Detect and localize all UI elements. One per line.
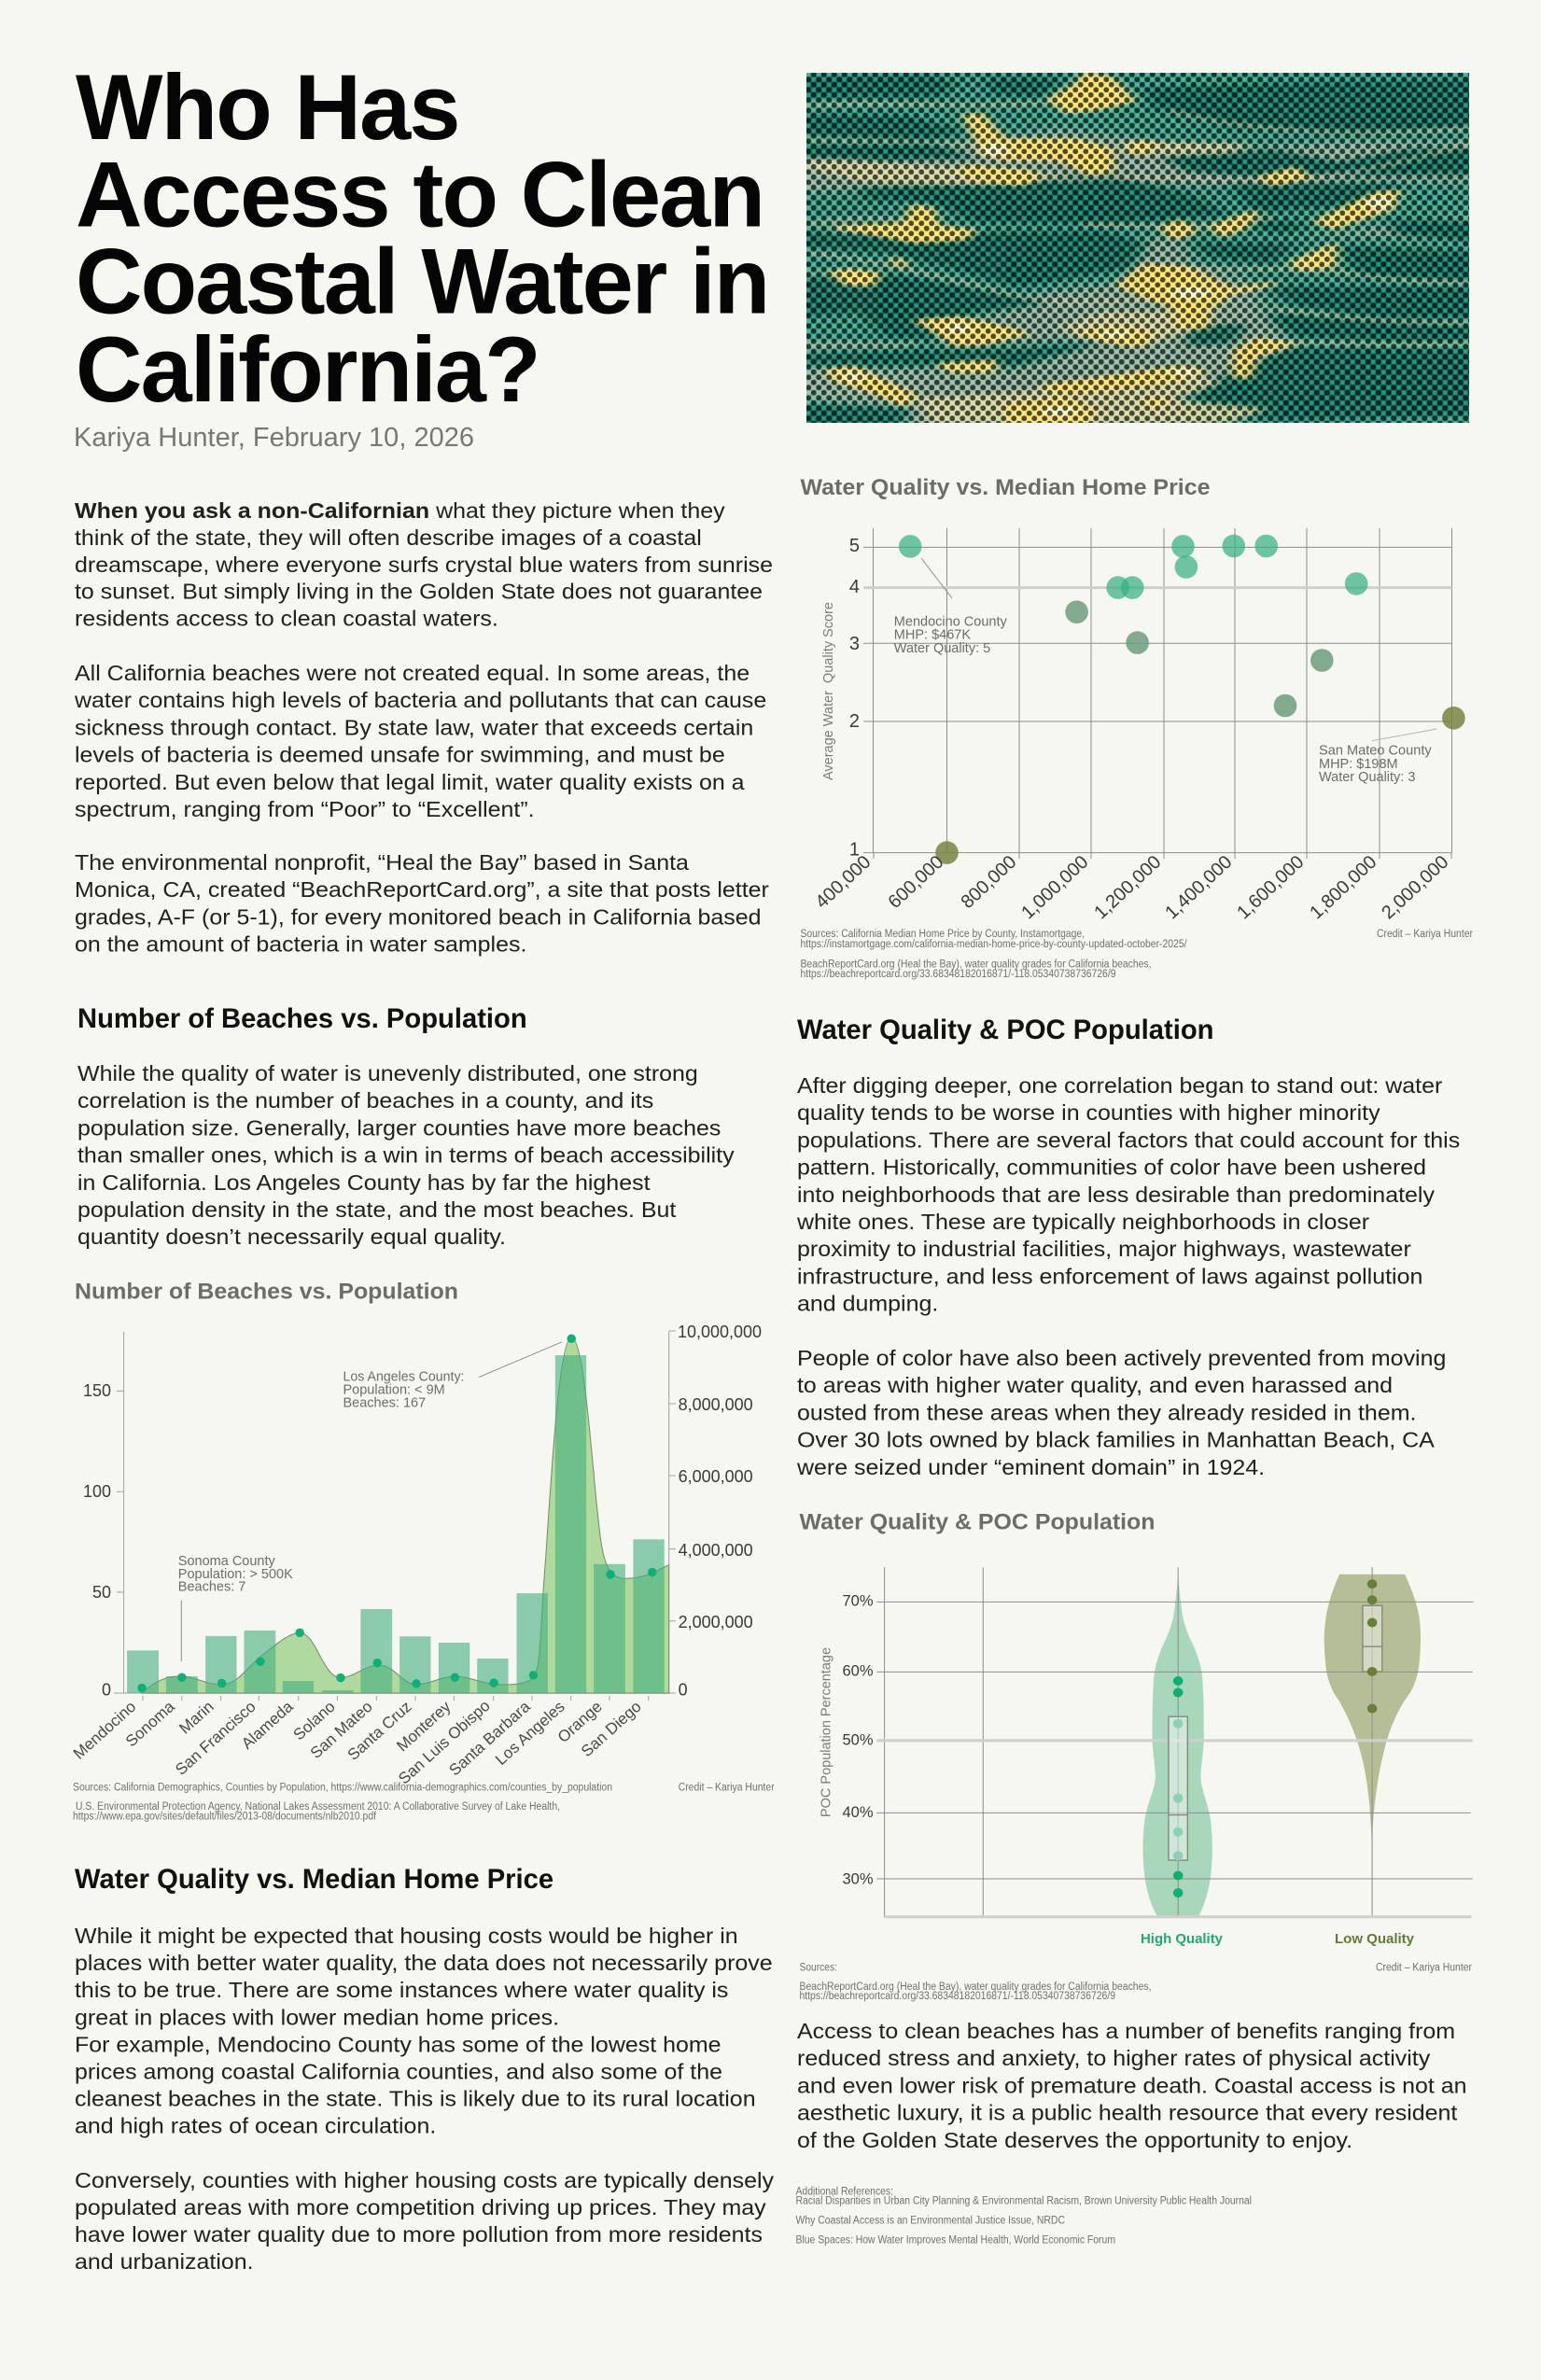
text: water quality and POC population: white ones. These are typically neighborhoods in closer xyxy=(796,1211,1369,1235)
intro paragraph 2: spectrum, ranging from “Poor” to “Excellent”. xyxy=(75,798,535,822)
chart sources: Sources: California Demographics, Counties by Population, https://www.california-demographics.com/counties_by_population xyxy=(73,1783,612,1794)
additional references: Additional References: xyxy=(795,2187,893,2198)
chart sources xyxy=(799,1962,1472,2002)
right axis labels xyxy=(678,1323,762,1699)
callout: Mendocino County: Water Quality: 5 xyxy=(894,641,990,656)
byline: Kariya Hunter, February 10, 2026 xyxy=(74,423,474,453)
callout: San Mateo County: Water Quality: 3 xyxy=(1319,770,1415,785)
text: water quality and POC population: infrastructure, and less enforcement of laws against pollution xyxy=(797,1265,1422,1289)
x axis labels: 400,000 xyxy=(812,852,875,913)
right axis labels: 10,000,000 xyxy=(678,1323,762,1341)
callout: Los Angeles County: Los Angeles County: xyxy=(343,1370,465,1385)
category label: high quality: High Quality xyxy=(1141,1931,1224,1947)
county labels: Monterey xyxy=(393,1698,455,1755)
text: water quality and POC population: Over 30 lots owned by black families in Manhattan Beach, CA xyxy=(797,1428,1436,1452)
violin: low quality xyxy=(1324,1575,1421,1845)
callout: Sonoma County: Population: > 500K xyxy=(178,1567,293,1582)
x axis labels: 2,000,000 xyxy=(1378,852,1452,923)
left axis labels: 0 xyxy=(102,1680,111,1699)
county labels: Santa Cruz xyxy=(344,1698,415,1764)
callout: Mendocino County: Mendocino County xyxy=(894,614,1008,629)
x axis labels: 1,000,000 xyxy=(1017,852,1092,923)
text: water quality vs home price: For example, Mendocino County has some of the lowest home xyxy=(75,2033,721,2057)
intro paragraph 1: dreamscape, where everyone surfs crystal blue waters from sunrise xyxy=(75,553,773,578)
chart sources: Sources: xyxy=(799,1962,837,1973)
title: Coastal Water in xyxy=(76,230,768,333)
chart: water quality vs median home price xyxy=(801,475,1473,980)
chart sources xyxy=(73,1783,775,1822)
y axis labels: 60% xyxy=(842,1663,874,1680)
intro paragraph 1: residents access to clean coastal waters. xyxy=(75,607,498,631)
population area curve xyxy=(142,1337,669,1693)
y axis labels xyxy=(842,1593,874,1888)
left axis labels: 150 xyxy=(83,1381,111,1400)
text: number of beaches: correlation is the number of beaches in a county, and its xyxy=(77,1089,653,1113)
y axis title: POC Population Percentage xyxy=(819,1647,834,1817)
chart title: Number of Beaches vs. Population xyxy=(75,1279,458,1305)
chart sources: Sources: California Median Home Price by County, Instamortgage, xyxy=(801,929,1085,940)
chart sources xyxy=(801,929,1473,980)
right axis labels: 0 xyxy=(679,1680,688,1699)
title: Who Has xyxy=(76,55,459,159)
closing paragraph: of the Golden State deserves the opportunity to enjoy. xyxy=(797,2129,1352,2153)
text: water quality and POC population: populations. There are several factors that could account for this xyxy=(797,1128,1460,1153)
chart title: Water Quality & POC Population xyxy=(799,1510,1156,1535)
text: water quality vs home price: populated areas with more competition driving up prices. They may xyxy=(75,2196,767,2220)
title: California? xyxy=(76,317,539,421)
text: water quality vs home price: While it might be expected that housing costs would be higher in xyxy=(75,1925,738,1949)
chart sources: https://www.epa.gov/sites/default/files/2013-08/documents/nlb2010.pdf xyxy=(73,1811,377,1822)
x axis labels xyxy=(812,852,1452,923)
chart sources: https://beachreportcard.org/33.68348182016871/-118.05340738736726/9 xyxy=(799,1991,1115,2002)
text: water quality vs home price: and urbanization. xyxy=(75,2250,254,2275)
county labels: Solano xyxy=(290,1698,339,1743)
chart: number of beaches vs population xyxy=(70,1279,775,1822)
intro paragraph 3: grades, A-F (or 5-1), for every monitored beach in California based xyxy=(75,905,762,930)
text: number of beaches: than smaller ones, which is a win in terms of beach accessibility xyxy=(77,1143,735,1168)
intro paragraph 2: All California beaches were not created equal. In some areas, the xyxy=(75,662,749,686)
text: number of beaches: population density in the state, and the most beaches. But xyxy=(77,1198,677,1223)
county labels: Los Angeles xyxy=(492,1698,568,1769)
county labels: San Mateo xyxy=(307,1698,376,1762)
y axis title: Average Water Quality Score xyxy=(821,602,836,780)
callout: Los Angeles County: Population: < 9M xyxy=(343,1383,445,1398)
text: number of beaches: population size. Generally, larger counties have more beaches xyxy=(77,1116,721,1141)
additional references: Why Coastal Access is an Environmental Justice Issue, NRDC xyxy=(795,2216,1065,2227)
chart sources: https://instamortgage.com/california-median-home-price-by-county-updated-october-2025/ xyxy=(801,939,1187,950)
chart sources: Credit – Kariya Hunter xyxy=(1376,1962,1472,1973)
bars: beaches per county xyxy=(127,1355,665,1693)
county labels: Alameda xyxy=(238,1697,297,1753)
closing paragraph: and even lower risk of premature death. Coastal access is not an xyxy=(797,2074,1467,2098)
category label: low quality: Low Quality xyxy=(1335,1931,1415,1947)
x axis labels: 1,800,000 xyxy=(1306,852,1380,923)
data points xyxy=(899,535,1465,864)
x axis labels: 600,000 xyxy=(885,852,947,913)
closing paragraph: aesthetic luxury, it is a public health resource that every resident xyxy=(797,2101,1458,2125)
heading: number of beaches: Number of Beaches vs. Population xyxy=(77,1004,527,1034)
callout: San Mateo County xyxy=(1319,729,1437,785)
county labels: San Luis Obispo xyxy=(395,1697,494,1787)
callout: Sonoma County xyxy=(178,1554,293,1661)
x axis labels: 1,600,000 xyxy=(1233,852,1308,923)
population dots xyxy=(137,1334,657,1692)
chart sources: Credit – Kariya Hunter xyxy=(679,1783,775,1794)
y axis labels: 2 xyxy=(849,711,860,732)
callout: Mendocino County xyxy=(894,558,1008,656)
text: water quality vs home price: prices among coastal California counties, and also some of the xyxy=(75,2060,722,2084)
intro paragraph 3: on the amount of bacteria in water samples. xyxy=(75,932,526,957)
y axis labels: 5 xyxy=(849,536,860,556)
callout: San Mateo County: San Mateo County xyxy=(1319,744,1432,759)
chart sources: U.S. Environmental Protection Agency, National Lakes Assessment 2010: A Collaborative Survey of Lake Health, xyxy=(76,1801,560,1813)
hero image: halftone water with sunlight reflections xyxy=(785,56,1489,436)
x axis labels: 1,400,000 xyxy=(1161,852,1236,923)
text: water quality and POC population: were seized under “eminent domain” in 1924. xyxy=(796,1456,1265,1480)
grid xyxy=(876,1567,1474,1917)
text: water quality and POC population: After digging deeper, one correlation began to stand out: water xyxy=(797,1074,1442,1099)
right axis labels: 2,000,000 xyxy=(679,1613,753,1631)
intro paragraph 2: levels of bacteria is deemed unsafe for swimming, and must be xyxy=(75,743,725,767)
right axis labels: 8,000,000 xyxy=(679,1395,753,1414)
chart sources: BeachReportCard.org (Heal the Bay), water quality grades for California beaches, xyxy=(801,959,1152,970)
chart sources: Credit – Kariya Hunter xyxy=(1377,929,1473,940)
county labels xyxy=(70,1697,645,1787)
text: water quality and POC population: pattern. Historically, communities of color have been ushered xyxy=(797,1155,1426,1180)
text: water quality and POC population: ousted from these areas when they already resided in them. xyxy=(797,1401,1416,1425)
text: water quality and POC population: proximity to industrial facilities, major highways, wastewater xyxy=(797,1238,1411,1262)
chart: water quality and POC population violin plot xyxy=(799,1510,1474,2002)
left axis labels: 100 xyxy=(83,1482,111,1501)
y axis labels: 4 xyxy=(849,577,860,597)
x axis labels: 800,000 xyxy=(958,852,1020,913)
title: Access to Clean xyxy=(76,142,763,245)
y axis labels: 1 xyxy=(849,840,860,861)
text: water quality vs home price: and high rates of ocean circulation. xyxy=(75,2114,436,2138)
text: water quality and POC population: People of color have also been actively prevented from moving xyxy=(797,1347,1446,1371)
left axis labels xyxy=(83,1381,111,1699)
text: water quality vs home price: have lower water quality due to more pollution from more residents xyxy=(75,2223,763,2247)
y axis labels: 3 xyxy=(849,634,860,654)
box plots xyxy=(1169,1605,1382,1860)
y axis labels: 50% xyxy=(842,1732,874,1749)
intro paragraph 1: think of the state, they will often describe images of a coastal xyxy=(75,526,702,551)
text: water quality vs home price: cleanest beaches in the state. This is likely due to its rural location xyxy=(75,2087,756,2111)
chart sources: https://beachreportcard.org/33.68348182016871/-118.05340738736726/9 xyxy=(801,969,1116,980)
callout: Los Angeles County: Beaches: 167 xyxy=(343,1395,426,1410)
text: water quality vs home price: this to be true. There are some instances where water quality is xyxy=(75,1979,728,2003)
county labels: Sonoma xyxy=(122,1697,178,1750)
y axis labels: 40% xyxy=(842,1804,874,1821)
text: water quality and POC population: to areas with higher water quality, and even harassed and xyxy=(797,1374,1393,1398)
heading: water quality and POC population: Water Quality & POC Population xyxy=(797,1015,1213,1045)
text: water quality vs home price: great in places with lower median home prices. xyxy=(75,2006,559,2030)
text: water quality and POC population: quality tends to be worse in counties with higher minority xyxy=(797,1101,1380,1126)
callout: Los Angeles County xyxy=(343,1342,562,1410)
intro paragraph 1: When you ask a non-Californian xyxy=(75,499,429,524)
county labels: San Diego xyxy=(578,1698,645,1760)
county labels: Santa Barbara xyxy=(445,1697,534,1779)
chart sources: BeachReportCard.org (Heal the Bay), water quality grades for California beaches, xyxy=(799,1981,1152,1993)
intro paragraph 2: reported. But even below that legal limit, water quality exists on a xyxy=(75,771,745,795)
text: water quality and POC population: into neighborhoods that are less desirable than predominately xyxy=(797,1183,1436,1208)
callout: San Mateo County: MHP: $198M xyxy=(1319,757,1398,772)
heading: water quality vs home price: Water Quality vs. Median Home Price xyxy=(75,1865,553,1895)
text: water quality and POC population: and dumping. xyxy=(797,1292,938,1316)
y axis labels xyxy=(849,536,860,861)
y axis labels: 70% xyxy=(842,1593,874,1610)
violin: high quality xyxy=(1142,1576,1212,1917)
callout: Sonoma County: Sonoma County xyxy=(178,1554,276,1569)
grid xyxy=(863,528,1452,859)
intro paragraph 2: sickness through contact. By state law, water that exceeds certain xyxy=(75,716,753,740)
county labels: Marin xyxy=(175,1698,217,1737)
axes xyxy=(114,1331,676,1701)
text: number of beaches: While the quality of water is unevenly distributed, one strong xyxy=(77,1062,698,1086)
intro paragraph 3: Monica, CA, created “BeachReportCard.org”, a site that posts letter xyxy=(75,878,769,903)
additional references: Racial Disparities in Urban City Planning & Environmental Racism, Brown University Public Health Journal xyxy=(795,2196,1252,2207)
right axis labels: 6,000,000 xyxy=(679,1467,753,1486)
intro paragraph 1: to sunset. But simply living in the Golden State does not guarantee xyxy=(75,580,763,604)
additional references xyxy=(795,2187,1252,2247)
right axis labels: 4,000,000 xyxy=(679,1541,753,1560)
callout: Mendocino County: MHP: $467K xyxy=(894,628,971,643)
chart title: Water Quality vs. Median Home Price xyxy=(801,475,1210,500)
callout: Sonoma County: Beaches: 7 xyxy=(178,1580,245,1595)
y axis labels: 30% xyxy=(842,1871,874,1888)
additional references: Blue Spaces: How Water Improves Mental Health, World Economic Forum xyxy=(795,2235,1115,2247)
intro paragraph 3: The environmental nonprofit, “Heal the Bay” based in Santa xyxy=(75,851,689,875)
x axis labels: 1,200,000 xyxy=(1090,852,1165,923)
closing paragraph: reduced stress and anxiety, to higher rates of physical activity xyxy=(797,2047,1431,2071)
county labels: Orange xyxy=(554,1698,606,1746)
county labels: Mendocino xyxy=(70,1698,139,1763)
left axis labels: 50 xyxy=(92,1583,111,1602)
intro paragraph 2: water contains high levels of bacteria and pollutants that can cause xyxy=(74,689,766,713)
data points xyxy=(1173,1579,1377,1897)
closing paragraph: Access to clean beaches has a number of benefits ranging from xyxy=(797,2020,1455,2044)
intro paragraph 1: what they picture when they xyxy=(429,499,726,524)
text: number of beaches: quantity doesn’t necessarily equal quality. xyxy=(77,1225,506,1250)
text: number of beaches: in California. Los Angeles County has by far the highest xyxy=(77,1171,651,1196)
text: water quality vs home price: places with better water quality, the data does not necessarily prove xyxy=(75,1952,773,1976)
county labels: San Francisco xyxy=(172,1698,259,1779)
text: water quality vs home price: Conversely, counties with higher housing costs are typically densely xyxy=(75,2169,775,2193)
